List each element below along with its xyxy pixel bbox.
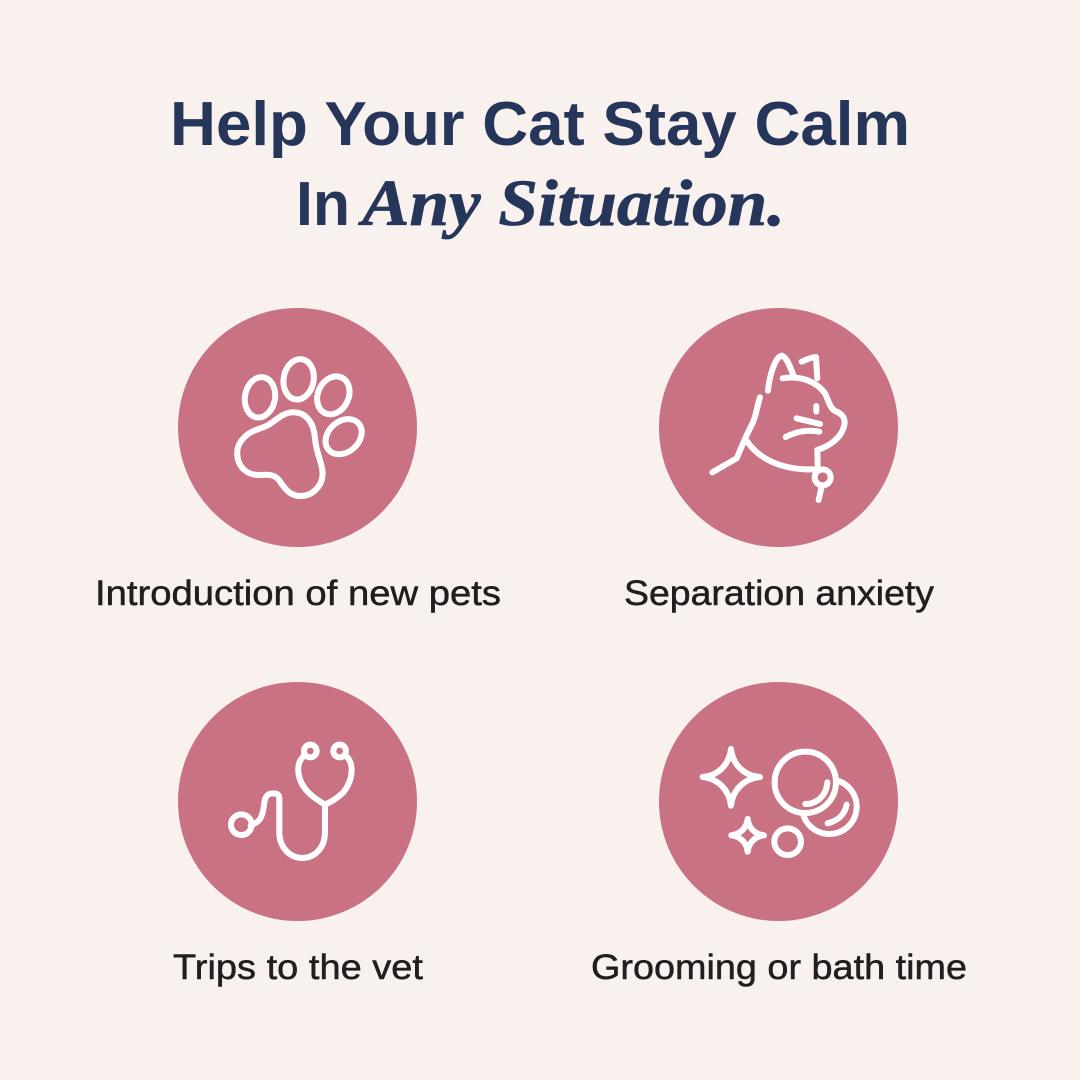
- icon: stethoscope: [231, 745, 352, 858]
- label: Introduction of new pets: [95, 574, 501, 613]
- label: Grooming or bath time: [591, 948, 967, 987]
- circle: paw background: [178, 308, 417, 547]
- icon: paw print: [237, 357, 369, 496]
- title: Help Your Cat Stay Calm: [170, 90, 910, 159]
- title: [170, 90, 910, 240]
- panel: trips to the vet: [173, 682, 423, 987]
- label: Trips to the vet: [173, 948, 423, 987]
- label: Separation anxiety: [624, 574, 935, 613]
- panel: separation anxiety: [624, 308, 935, 613]
- circle: cat background: [659, 308, 898, 547]
- icon: cat with collar: [712, 356, 845, 500]
- title: In: [296, 170, 350, 239]
- panel: grooming or bath time: [591, 682, 967, 987]
- title: Any Situation.: [358, 167, 785, 240]
- circle: stethoscope background: [178, 682, 417, 921]
- icon: sparkles and bubbles: [703, 749, 857, 855]
- panel: introduction of new pets: [95, 308, 501, 613]
- circle: bubbles background: [659, 682, 898, 921]
